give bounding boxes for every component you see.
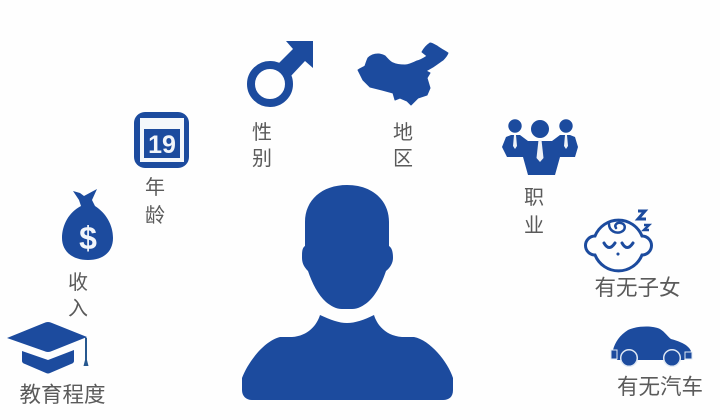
icon: money bag bbox=[62, 189, 113, 260]
label: region bbox=[393, 121, 413, 170]
label: income bbox=[68, 271, 88, 320]
label: region: 地 bbox=[393, 121, 413, 144]
label: has children: 有无子女 bbox=[594, 276, 681, 300]
label: income: 入 bbox=[68, 298, 88, 320]
icon: central person silhouette bbox=[242, 185, 453, 400]
icon: China map bbox=[358, 43, 448, 105]
label: income: 收 bbox=[68, 271, 88, 294]
icon: calendar 19: 19 bbox=[148, 131, 176, 159]
icon: car bbox=[611, 326, 692, 366]
label: region: 区 bbox=[393, 148, 413, 170]
label: gender: 别 bbox=[252, 147, 272, 170]
label: occupation: 职 bbox=[524, 187, 544, 209]
label: education: 教育程度 bbox=[19, 383, 106, 407]
label: has car: 有无汽车 bbox=[617, 375, 703, 399]
label: occupation: 业 bbox=[524, 214, 544, 237]
icon: money bag: $ bbox=[79, 220, 97, 256]
label: occupation bbox=[524, 187, 544, 237]
label: gender: 性 bbox=[252, 121, 272, 144]
label: age bbox=[145, 176, 165, 227]
icon: calendar 19 bbox=[134, 112, 189, 168]
icon: male symbol bbox=[251, 41, 313, 103]
icon: graduation cap bbox=[7, 322, 88, 374]
label: gender bbox=[252, 121, 272, 170]
label: age: 龄 bbox=[145, 204, 165, 227]
label: age: 年 bbox=[145, 176, 165, 199]
icon: business people bbox=[502, 119, 578, 175]
icon: sleeping baby bbox=[586, 211, 652, 271]
